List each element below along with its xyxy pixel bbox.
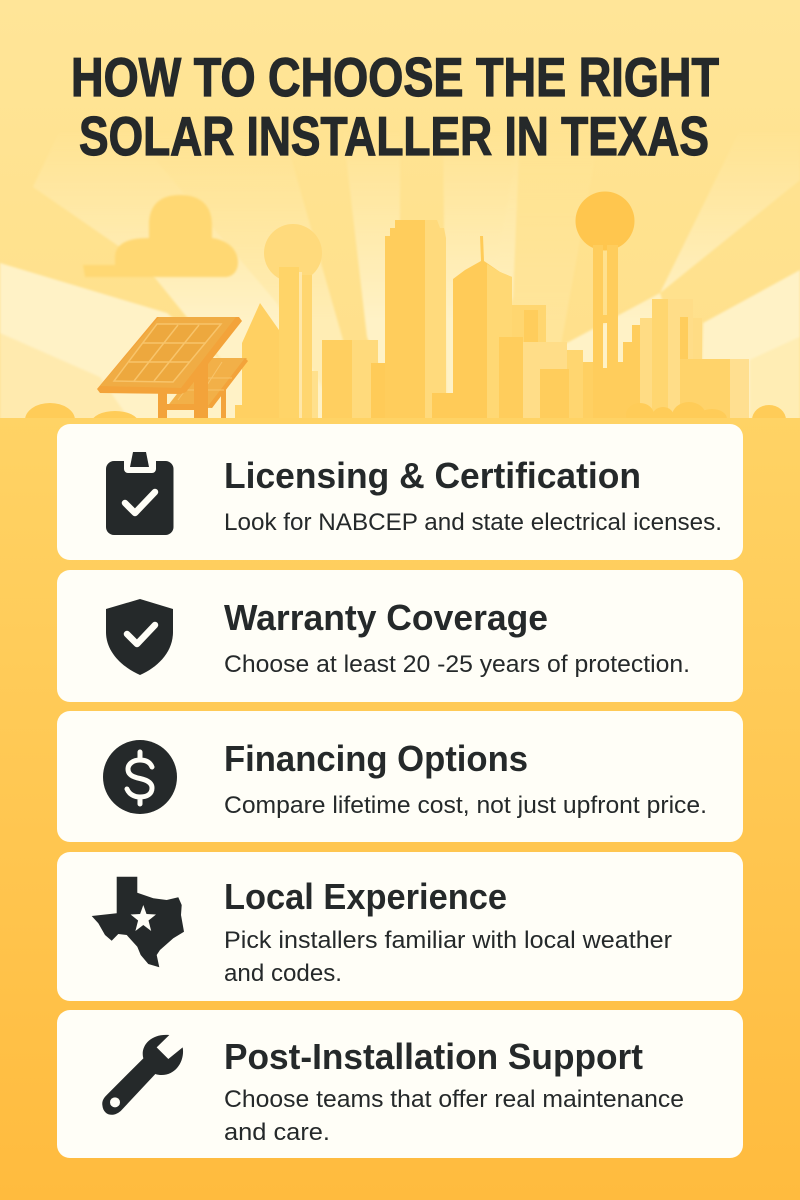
icon: shield with check: [106, 599, 173, 675]
solar panels: [97, 317, 248, 419]
card: post-installation support: [57, 1010, 743, 1158]
title: [71, 46, 719, 167]
rear panel: [166, 358, 248, 419]
heading: Financing Options: [224, 738, 528, 779]
sky background with sun rays: [0, 0, 800, 425]
spire tower: [453, 236, 546, 419]
card: post-installation support: and care.: [224, 1119, 330, 1146]
card: local experience: [57, 852, 743, 1001]
description: Choose teams that offer real maintenance: [224, 1086, 684, 1113]
card: warranty coverage: [57, 570, 743, 702]
low block: [322, 340, 385, 419]
left reunion tower: [264, 224, 322, 419]
mid buildings: [523, 342, 593, 419]
card: licensing and certification: [57, 424, 743, 560]
card: local experience: and codes.: [224, 960, 342, 987]
heading: Local Experience: [224, 876, 507, 917]
front panel: [97, 317, 242, 419]
icon: clipboard with check: [106, 452, 174, 535]
heading: Licensing & Certification: [224, 455, 641, 496]
heading: Warranty Coverage: [224, 597, 548, 638]
bushes: [25, 402, 786, 437]
icon: dollar coin: [103, 740, 177, 814]
lower background panel: [0, 418, 800, 1200]
right buildings: [618, 299, 749, 419]
description: Look for NABCEP and state electrical icenses.: [224, 509, 722, 536]
icon: wrench: [102, 1035, 183, 1115]
pyramid building: [235, 303, 279, 419]
description: Choose at least 20 -25 years of protection.: [224, 651, 690, 678]
right reunion tower: [576, 192, 634, 419]
description: Pick installers familiar with local weather: [224, 927, 672, 954]
cloud: [83, 195, 238, 277]
heading: Post-Installation Support: [224, 1036, 643, 1077]
tall tower: [385, 220, 460, 419]
description: Compare lifetime cost, not just upfront price.: [224, 792, 707, 819]
card: financing options: [57, 711, 743, 842]
skyline: [25, 192, 786, 437]
icon: texas with star: [92, 877, 184, 967]
